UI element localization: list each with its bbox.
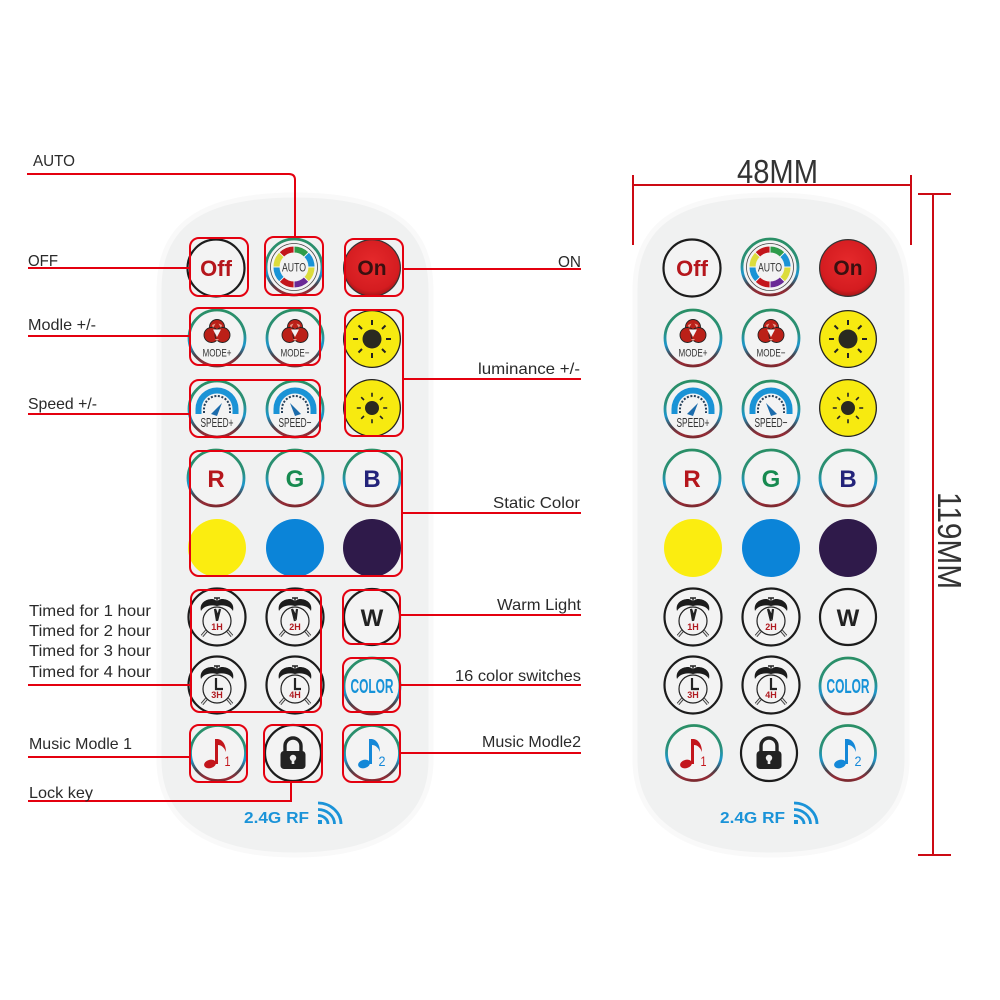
button: timer 1H: 1H [211, 622, 223, 632]
button: Speed - [267, 381, 323, 437]
label: timed hours: Timed for 1 hour [29, 603, 152, 620]
label: Modle +/-: Modle +/- [28, 317, 96, 334]
button: W [344, 589, 400, 645]
button: Music 2: 2 [378, 753, 386, 769]
button: timer 1H: 1H [687, 622, 699, 632]
label: 16 color switches: 16 color switches [455, 668, 581, 685]
button: Music 1: 1 [700, 753, 707, 769]
button: R: R [207, 466, 225, 493]
button: Music 1: 1 [224, 753, 231, 769]
button: Speed - [743, 381, 799, 437]
button: COLOR: COLOR [350, 676, 394, 698]
colour button: blue [742, 519, 800, 577]
frame: Off [190, 238, 248, 296]
button: Auto [266, 239, 322, 295]
button: G: G [286, 466, 304, 493]
button: On [343, 239, 401, 297]
label: OFF: OFF [28, 253, 58, 270]
button: Mode + [665, 310, 721, 366]
frame: Auto [265, 237, 323, 295]
button: Music 2 [344, 726, 400, 780]
frame: Warm Light [343, 590, 400, 644]
label: Speed +/-: Speed +/- [28, 396, 97, 413]
button: Mode +: MODE+ [202, 348, 232, 360]
frame: Music 1 [190, 725, 247, 782]
button: timer 4H [266, 656, 324, 714]
button: G [743, 450, 799, 506]
button: Speed +: SPEED+ [200, 415, 234, 430]
annotation frames [190, 237, 403, 782]
button: Off [188, 240, 244, 296]
colour button: purple [819, 519, 877, 577]
dimension: height 119MM: 119MM [931, 492, 968, 589]
button: Mode + [189, 310, 245, 366]
button: Mode -: MODE− [280, 348, 310, 360]
button: Speed -: SPEED− [754, 415, 788, 430]
remote body [635, 195, 907, 855]
label: timed hours: Timed for 2 hour [29, 623, 152, 640]
button: Mode +: MODE+ [678, 348, 708, 360]
button: timer 4H: 4H [289, 690, 301, 700]
button: Auto: AUTO [282, 260, 306, 274]
button: W: W [361, 605, 384, 632]
button: Lock [265, 725, 321, 781]
button: Music 1 [190, 726, 246, 780]
button: COLOR [820, 658, 876, 714]
frame: Mode [190, 308, 320, 365]
frame: Lock [264, 725, 322, 782]
icon: wireless signal [318, 803, 341, 824]
label: Music Modle2: Music Modle2 [482, 734, 581, 751]
button: Mode - [267, 310, 323, 366]
button: timer 2H [266, 588, 324, 646]
frame: On [345, 239, 403, 296]
icon: wireless signal [794, 803, 817, 824]
button: Music 2: 2 [854, 753, 862, 769]
button: Speed -: SPEED− [278, 415, 312, 430]
button: timer 4H: 4H [765, 690, 777, 700]
label: Static Color: Static Color [493, 495, 581, 512]
button: On: On [357, 257, 387, 280]
button: Off: Off [676, 256, 709, 281]
button: Music 2 [820, 726, 876, 780]
frame: Music 2 [343, 725, 400, 782]
button: Auto: AUTO [758, 260, 782, 274]
frame: Speed [190, 380, 320, 437]
button: Mode -: MODE− [756, 348, 786, 360]
label: Music Modle 1: Music Modle 1 [29, 736, 132, 753]
button: B [344, 450, 400, 506]
button: G: G [762, 466, 780, 493]
button: Speed + [665, 381, 721, 437]
button: timer 1H [664, 588, 722, 646]
label: Warm Light: Warm Light [497, 597, 582, 614]
button: Lock [741, 725, 797, 781]
label: timed hours [29, 603, 152, 681]
colour button: yellow [188, 519, 246, 577]
button: luminance - [343, 379, 401, 437]
button: Auto [742, 239, 798, 295]
button: timer 3H [188, 656, 246, 714]
button: Off: Off [200, 256, 233, 281]
button: timer 1H [188, 588, 246, 646]
button: W: W [837, 605, 860, 632]
label: ON: ON [558, 254, 581, 271]
label: timed hours: Timed for 4 hour [29, 664, 152, 681]
button: luminance + [343, 310, 401, 368]
dimension: height 119MM [918, 194, 968, 855]
colour button: purple [343, 519, 401, 577]
button: G [267, 450, 323, 506]
button: timer 2H: 2H [289, 622, 301, 632]
button: timer 3H: 3H [687, 690, 699, 700]
button: On: On [833, 257, 863, 280]
button: R: R [683, 466, 701, 493]
label: AUTO: AUTO [33, 153, 75, 170]
button: Speed + [189, 381, 245, 437]
button: W [820, 589, 876, 645]
label: Lock key: Lock key [29, 785, 93, 802]
frame: Static Color [190, 451, 402, 576]
button: B: B [363, 466, 381, 493]
button: R [188, 450, 244, 506]
button: timer 4H [742, 656, 800, 714]
button: B: B [839, 466, 857, 493]
colour button: blue [266, 519, 324, 577]
button: timer 2H [742, 588, 800, 646]
button: Off [664, 240, 720, 296]
button: timer 2H: 2H [765, 622, 777, 632]
button: Mode - [743, 310, 799, 366]
button: Speed +: SPEED+ [676, 415, 710, 430]
button: COLOR: COLOR [826, 676, 870, 698]
button: timer 3H [664, 656, 722, 714]
label: luminance +/-: luminance +/- [478, 361, 580, 378]
button: On [819, 239, 877, 297]
frame: Color [343, 658, 400, 712]
dimension: width 48MM: 48MM [737, 153, 818, 190]
remote control: dimension view [635, 195, 907, 855]
button: B [820, 450, 876, 506]
brand: 2.4G RF: 2.4G RF [244, 810, 309, 827]
leader lines [27, 174, 581, 801]
button: luminance - [819, 379, 877, 437]
remote control: annotated [159, 195, 431, 855]
colour button: yellow [664, 519, 722, 577]
frame: luminance [345, 310, 403, 436]
brand: 2.4G RF: 2.4G RF [720, 810, 785, 827]
remote body [159, 195, 431, 855]
button: Music 1 [666, 726, 722, 780]
button: R [664, 450, 720, 506]
button: COLOR [344, 658, 400, 714]
button: timer 3H: 3H [211, 690, 223, 700]
dimension: width 48MM [633, 153, 911, 245]
frame: Timers [191, 590, 321, 712]
button: luminance + [819, 310, 877, 368]
label: timed hours: Timed for 3 hour [29, 643, 152, 660]
